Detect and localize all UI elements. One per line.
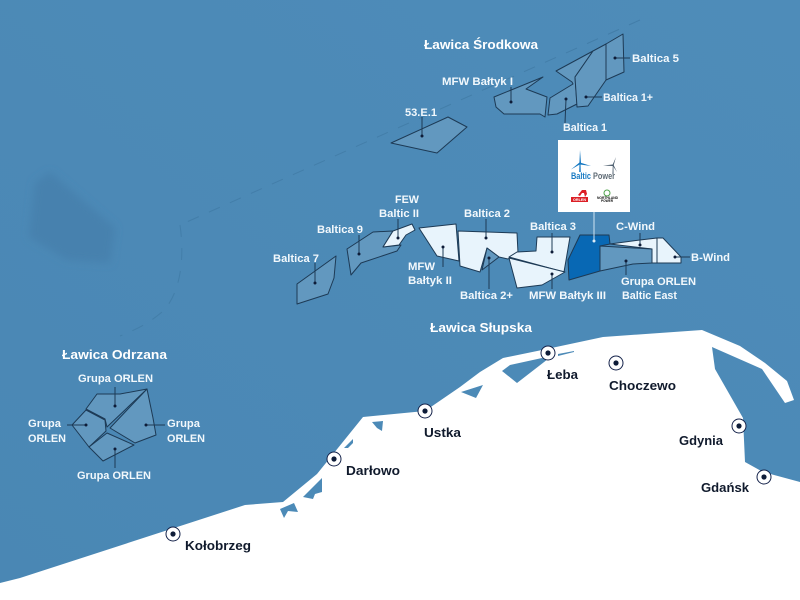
icon: small wind turbine: [603, 157, 617, 174]
zone: Grupa ORLEN east: ORLEN: [167, 433, 205, 445]
zone: FEW Baltic II: [379, 194, 420, 247]
zone: MFW Bałtyk I: [442, 76, 547, 117]
zone: Baltica 9: [317, 224, 401, 275]
coastline: land: [0, 330, 800, 600]
city: Ustka: Ustka: [424, 425, 462, 440]
zone: MFW Bałtyk I: MFW Bałtyk I: [442, 76, 513, 88]
zone: Grupa ORLEN Baltic East: Baltic East: [622, 290, 677, 302]
zone: FEW Baltic II: Baltic II: [379, 208, 419, 220]
zone: Grupa ORLEN north: [78, 373, 153, 427]
zone: C-Wind: [610, 221, 657, 263]
zone: Baltica 3: [509, 221, 576, 272]
zone: Baltica 5: Baltica 5: [632, 53, 679, 65]
area: Ławica Odrzana: [28, 347, 205, 482]
zone: Grupa ORLEN south: [77, 433, 151, 482]
zone: MFW Bałtyk III: MFW Bałtyk III: [529, 290, 606, 302]
zone: Baltica 1+: Baltica 1+: [603, 92, 653, 104]
zone: Grupa ORLEN west: Grupa: [28, 418, 62, 430]
zone: B-Wind: B-Wind: [691, 252, 730, 264]
zone: Baltica 5: [606, 34, 679, 80]
city: Łeba: Łeba: [547, 367, 579, 382]
zone: Baltica 7: [273, 253, 336, 304]
zone: FEW Baltic II: FEW: [395, 194, 420, 206]
logo: Northland Power: NORTHLAND: [597, 196, 619, 200]
zone: Baltica 2: Baltica 2: [464, 208, 510, 220]
logo: Northland Power: [597, 190, 619, 203]
zone: Baltica 2+: [460, 248, 513, 302]
dark seabed shoal: [29, 172, 115, 263]
zone: MFW Bałtyk II: MFW: [408, 261, 436, 273]
area: Ławica Środkowa: [391, 34, 679, 153]
city: Gdańsk: Gdańsk: [701, 480, 750, 495]
logo panel: Baltic Power: [558, 140, 630, 212]
zone: 53.E.1: 53.E.1: [405, 107, 437, 119]
heading: Ławica Środkowa: Ławica Środkowa: [424, 37, 539, 52]
zone: Baltica 3: Baltica 3: [530, 221, 576, 233]
city: Choczewo: Choczewo: [609, 378, 676, 393]
zone: Grupa ORLEN north: Grupa ORLEN: [78, 373, 153, 385]
logo wordmark: [571, 171, 615, 182]
icon: large wind turbine: [571, 150, 591, 172]
zone: Baltica 7: Baltica 7: [273, 253, 319, 265]
heading: Ławica Odrzana: Ławica Odrzana: [62, 347, 168, 362]
zone: Baltic Power: [568, 212, 610, 280]
zone: 53.E.1: [391, 107, 467, 153]
zone: B-Wind: [657, 238, 730, 264]
lagoons and coastal lakes: [280, 351, 574, 518]
zone: Baltica 1+: [575, 44, 653, 107]
zone: Baltica 2: [458, 208, 518, 272]
city: Gdynia: [679, 419, 746, 448]
zone: Baltica 1: [548, 51, 607, 134]
city: Łeba: [541, 346, 579, 382]
zone: Grupa ORLEN west: [28, 410, 106, 447]
zone: Grupa ORLEN west: ORLEN: [28, 433, 66, 445]
zone: Grupa ORLEN Baltic East: Grupa ORLEN: [621, 276, 696, 288]
city: Gdańsk: [701, 470, 771, 495]
city: Darłowo: [327, 452, 400, 478]
city: Kołobrzeg: [166, 527, 251, 553]
logo: ORLEN: ORLEN: [573, 197, 586, 202]
zone: MFW Bałtyk II: Bałtyk II: [408, 275, 452, 287]
zone: Baltica 2+: Baltica 2+: [460, 290, 513, 302]
logo wordmark: Power: [593, 171, 615, 182]
logo wordmark: Baltic: [571, 171, 591, 182]
city: Ustka: [418, 404, 462, 440]
city: Kołobrzeg: Kołobrzeg: [185, 538, 251, 553]
city: Choczewo: [609, 356, 676, 393]
zone: Grupa ORLEN east: Grupa: [167, 418, 201, 430]
zone: Grupa ORLEN east: [110, 389, 205, 445]
zone: MFW Bałtyk III: [509, 258, 606, 302]
zone: Baltica 1: Baltica 1: [563, 122, 607, 134]
logo: Northland Power: POWER: [601, 199, 614, 203]
dashed maritime boundary: [120, 20, 640, 336]
zone: Grupa ORLEN south: Grupa ORLEN: [77, 470, 151, 482]
zone: Baltica 9: Baltica 9: [317, 224, 363, 236]
city: Darłowo: Darłowo: [346, 463, 400, 478]
zone: MFW Bałtyk II: [408, 224, 459, 287]
zone: Grupa ORLEN Baltic East: [600, 246, 696, 302]
area: Ławica Słupska heading: Ławica Słupska: [430, 320, 533, 335]
zone: C-Wind: C-Wind: [616, 221, 655, 233]
city: Gdynia: Gdynia: [679, 433, 724, 448]
